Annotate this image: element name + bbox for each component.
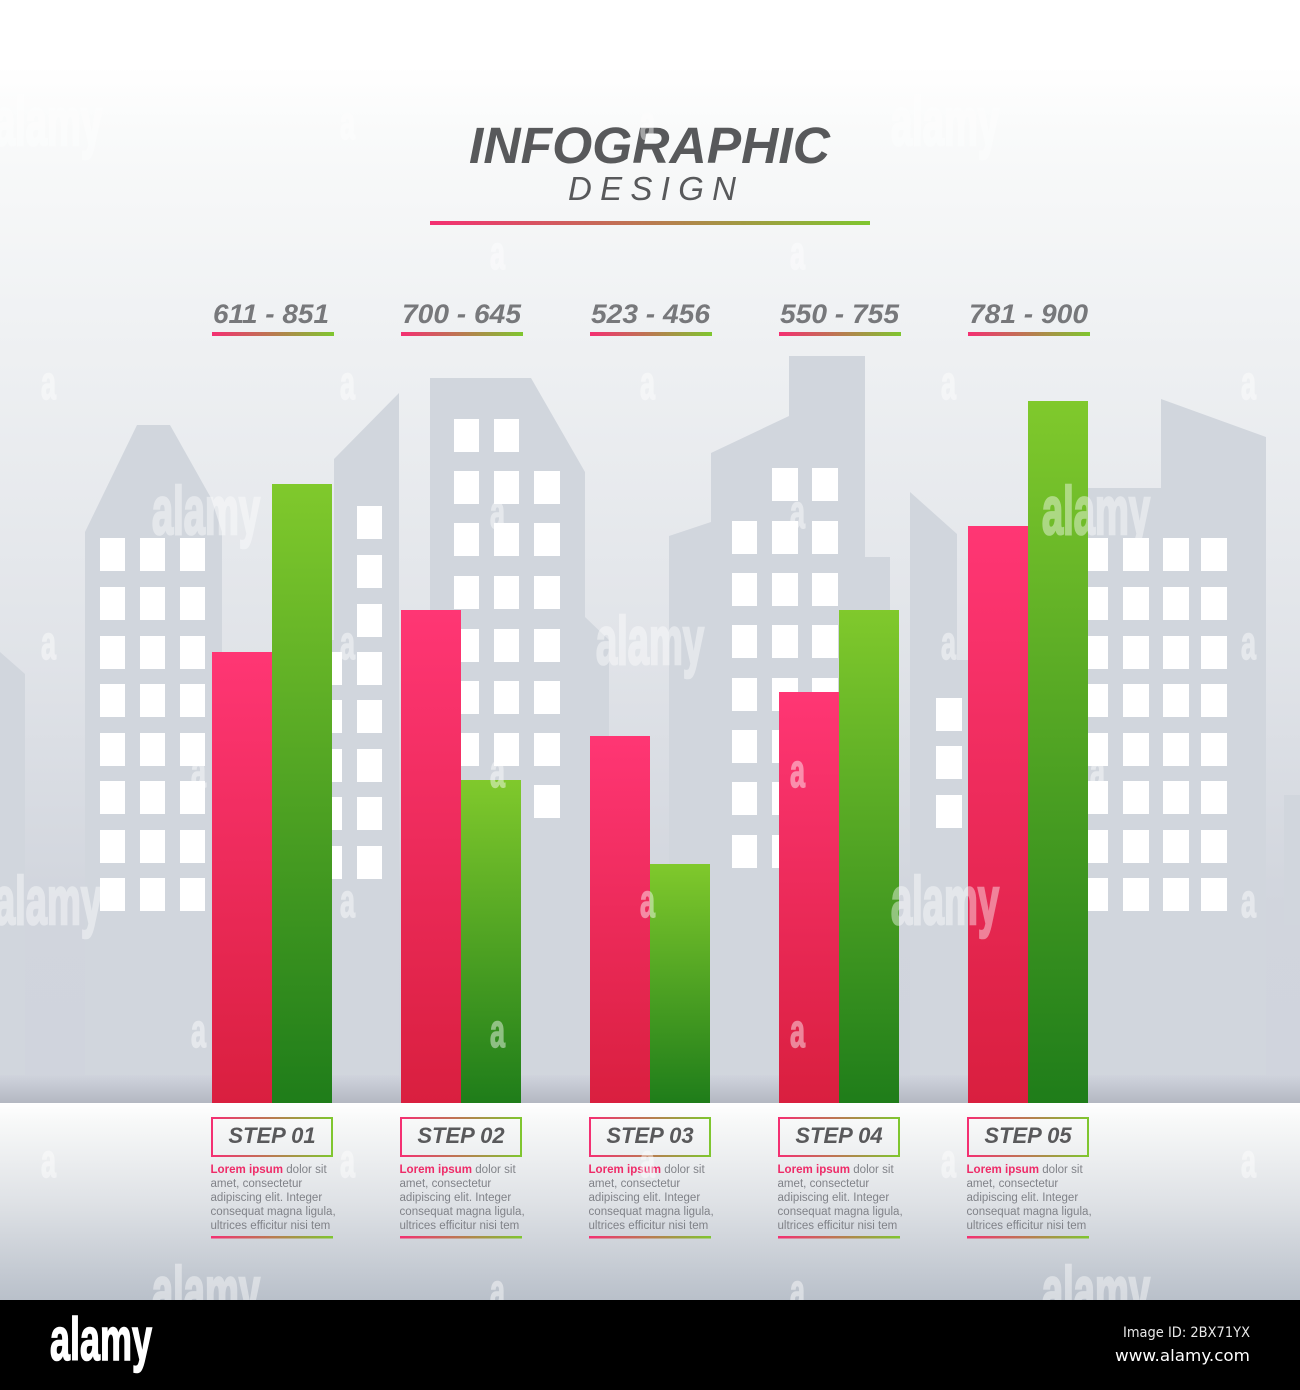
step 02 panel: adipiscing elit. Integer — [400, 1192, 511, 1204]
step 01 panel: consequat magna ligula, — [210, 1206, 336, 1218]
watermarks: a — [790, 226, 805, 279]
step 05 panel: ultrices efficitur nisi tem — [966, 1220, 1086, 1232]
title — [430, 117, 870, 225]
watermarks: alamy — [152, 1253, 260, 1329]
bars: step 02 — [401, 610, 521, 1103]
watermarks: a — [790, 744, 805, 797]
step 05 panel: adipiscing elit. Integer — [966, 1192, 1078, 1204]
step 04 panel — [778, 1118, 903, 1238]
watermarks: alamy — [152, 473, 260, 549]
step 03 panel: STEP 03 — [606, 1123, 694, 1148]
watermarks: a — [191, 744, 206, 797]
step 05 panel: consequat magna ligula, — [966, 1206, 1092, 1218]
floor — [0, 1103, 1300, 1300]
step 02 panel: amet, consectetur — [400, 1178, 491, 1190]
watermarks: a — [1090, 744, 1105, 797]
website: www.alamy.com — [1115, 1346, 1250, 1365]
watermarks: a — [490, 744, 505, 797]
building: 1 with windows — [85, 425, 222, 1075]
watermarks: a — [490, 1264, 505, 1317]
building: 6 with windows — [1040, 399, 1266, 1075]
watermarks: alamy — [891, 863, 999, 939]
step 02 panel: ultrices efficitur nisi tem — [400, 1220, 519, 1232]
watermarks: a — [640, 1134, 655, 1187]
watermarks: alamy — [1042, 1253, 1150, 1329]
ground shadow — [0, 1075, 1300, 1103]
bars: step 05 — [968, 401, 1088, 1103]
step 05 panel — [966, 1118, 1092, 1238]
step panels — [210, 1118, 1092, 1238]
watermarks: a — [1241, 874, 1256, 927]
watermarks: a — [790, 1004, 805, 1057]
range labels — [212, 299, 1090, 336]
step 04 panel: adipiscing elit. Integer — [778, 1192, 889, 1204]
watermarks: a — [490, 226, 505, 279]
watermarks: a — [640, 96, 655, 149]
watermarks: a — [340, 616, 355, 669]
step 03 panel: Lorem ipsum dolor sit — [588, 1164, 705, 1176]
step 04 panel: amet, consectetur — [778, 1178, 869, 1190]
step 03 panel: amet, consectetur — [588, 1178, 680, 1190]
watermarks: a — [640, 874, 655, 927]
step 01 panel: STEP 01 — [228, 1123, 316, 1148]
heading: design: DESIGN — [568, 170, 736, 207]
range label 5: 781 - 900 — [969, 299, 1088, 329]
watermarks: alamy — [596, 603, 704, 679]
bars: step 03 — [590, 736, 710, 1103]
step 03 panel — [588, 1118, 714, 1238]
image id: Image ID: 2BX71YX — [1123, 1325, 1250, 1341]
watermarks: a — [41, 356, 56, 409]
watermarks: a — [790, 485, 805, 538]
watermarks: a — [941, 616, 956, 669]
step 01 panel: amet, consectetur — [210, 1178, 302, 1190]
watermarks: a — [941, 356, 956, 409]
city skyline — [0, 356, 1300, 1075]
watermarks: a — [340, 1134, 355, 1187]
footer logo: alamy — [50, 1306, 152, 1373]
step 02 panel: STEP 02 — [417, 1123, 505, 1148]
step 01 panel — [210, 1118, 336, 1238]
building: far right — [1284, 795, 1300, 925]
step 05 panel: Lorem ipsum dolor sit — [966, 1164, 1083, 1176]
building: 3 with windows — [430, 378, 609, 1075]
bars: step 01 — [212, 484, 332, 1103]
watermarks: a — [790, 1264, 805, 1317]
heading: infographic: INFOGRAPHIC — [469, 117, 831, 174]
building: 5 with windows — [910, 492, 1000, 1075]
step 04 panel: ultrices efficitur nisi tem — [778, 1220, 897, 1232]
watermarks: a — [490, 485, 505, 538]
step 03 panel: ultrices efficitur nisi tem — [588, 1220, 708, 1232]
building: 2 with windows — [300, 393, 399, 1075]
background — [0, 0, 1300, 1103]
watermarks: a — [191, 1004, 206, 1057]
watermarks: a — [640, 356, 655, 409]
title underline — [430, 221, 870, 225]
watermarks: a — [1241, 1134, 1256, 1187]
watermarks: a — [340, 356, 355, 409]
range label 1: 611 - 851 — [213, 299, 329, 329]
step 03 panel: consequat magna ligula, — [588, 1206, 714, 1218]
step 04 panel: Lorem ipsum dolor sit — [778, 1164, 894, 1176]
step 01 panel: Lorem ipsum dolor sit — [210, 1164, 327, 1176]
step 04 panel: consequat magna ligula, — [778, 1206, 903, 1218]
bar chart — [212, 401, 1088, 1103]
step 05 panel: STEP 05 — [984, 1123, 1072, 1148]
footer bar — [0, 1300, 1300, 1390]
step 03 panel: adipiscing elit. Integer — [588, 1192, 700, 1204]
range label 4: 550 - 755 — [780, 299, 900, 329]
step 04 panel: STEP 04 — [795, 1123, 883, 1148]
building: far left — [0, 652, 25, 1075]
watermarks: a — [340, 96, 355, 149]
step 02 panel: consequat magna ligula, — [400, 1206, 525, 1218]
building: 4 with windows — [669, 356, 890, 1075]
step 05 panel: amet, consectetur — [966, 1178, 1058, 1190]
step 01 panel: ultrices efficitur nisi tem — [210, 1220, 330, 1232]
watermarks: a — [941, 1134, 956, 1187]
watermarks: alamy — [1042, 473, 1150, 549]
watermarks: a — [41, 616, 56, 669]
watermarks: a — [1241, 616, 1256, 669]
watermarks: a — [490, 1004, 505, 1057]
step 02 panel — [400, 1118, 525, 1238]
watermarks: alamy — [891, 84, 999, 160]
range label 2: 700 - 645 — [402, 299, 522, 329]
range label 3: 523 - 456 — [591, 299, 711, 329]
watermarks: a — [340, 874, 355, 927]
step 02 panel: Lorem ipsum dolor sit — [400, 1164, 516, 1176]
step 01 panel: adipiscing elit. Integer — [210, 1192, 322, 1204]
watermarks: a — [41, 1134, 56, 1187]
watermarks: a — [1241, 356, 1256, 409]
bars: step 04 — [779, 610, 899, 1103]
